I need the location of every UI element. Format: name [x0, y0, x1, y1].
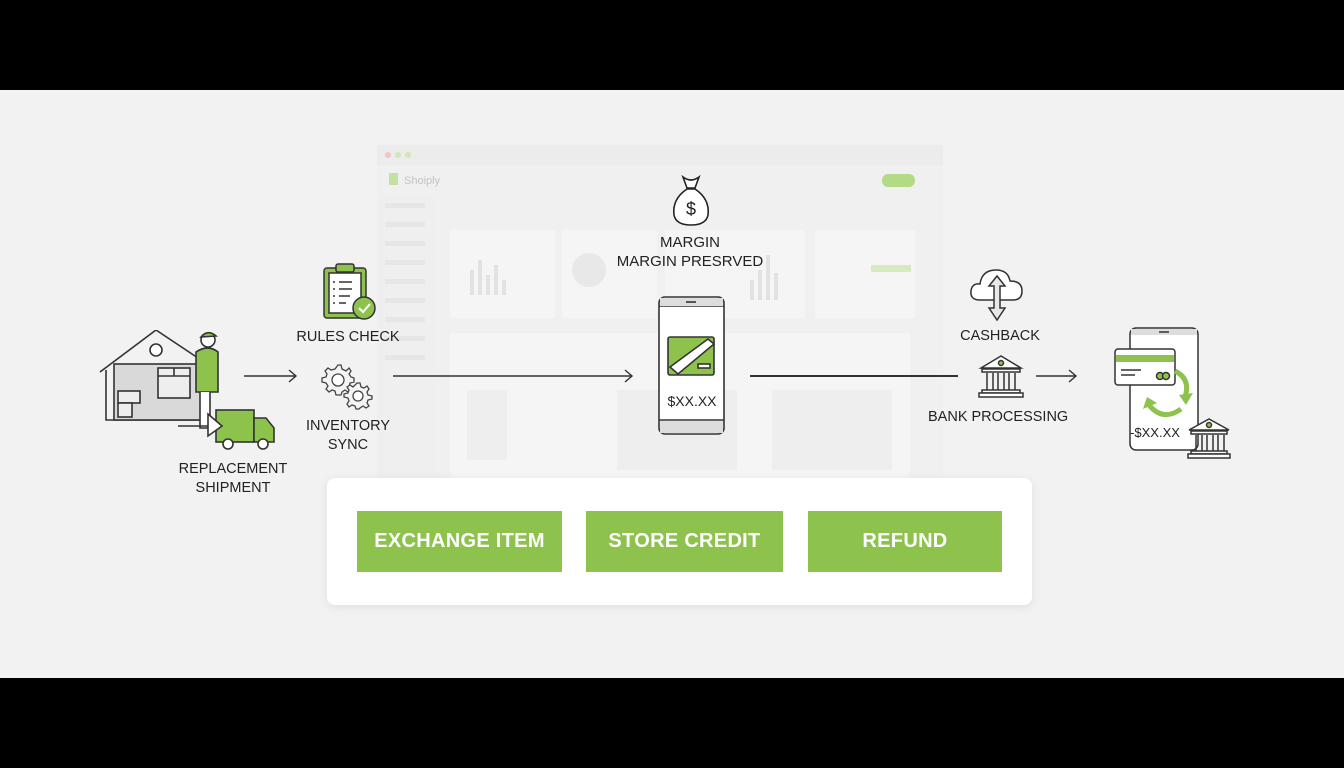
label: replacement shipment: SHIPMENT — [196, 480, 270, 496]
icon: phone with card: $XX.XX — [667, 393, 717, 409]
faded dashboard mockup: Shoiply — [404, 175, 441, 187]
icon: phone with card refund and bank: -$XX.XX — [1130, 425, 1180, 440]
button: store credit — [586, 511, 783, 572]
faded dashboard mockup — [377, 145, 943, 478]
label: inventory sync — [306, 418, 390, 453]
label: margin preserved: MARGIN PRESRVED — [617, 253, 763, 270]
button: refund: REFUND — [862, 530, 948, 552]
label: margin preserved: MARGIN — [660, 234, 720, 251]
panel: action buttons — [327, 478, 1032, 605]
line: phone to bank — [750, 375, 958, 377]
icon: cloud with arrows — [970, 269, 1023, 322]
label: inventory sync: SYNC — [328, 437, 368, 453]
label: replacement shipment — [179, 461, 288, 496]
label: bank processing: BANK PROCESSING — [928, 409, 1068, 425]
button: exchange item — [357, 511, 562, 572]
label: margin preserved — [617, 234, 763, 270]
button: exchange item: EXCHANGE ITEM — [374, 530, 545, 552]
arrow: to refund phone — [1036, 370, 1077, 382]
label: inventory sync: INVENTORY — [306, 418, 390, 434]
icon: money bag: $ — [686, 199, 696, 219]
icon: phone with card refund and bank — [1114, 327, 1231, 459]
icon: warehouse with worker and truck — [100, 330, 275, 450]
icon: clipboard check — [323, 263, 376, 320]
button: refund — [808, 511, 1002, 572]
label: cashback: CASHBACK — [960, 328, 1040, 344]
button: store credit: STORE CREDIT — [608, 530, 761, 552]
arrow: to phone — [393, 370, 633, 382]
icon: gears — [321, 364, 373, 410]
label: rules check: RULES CHECK — [296, 329, 400, 345]
icon: bank — [978, 355, 1024, 398]
icon: money bag — [673, 175, 709, 226]
main canvas — [0, 90, 1344, 678]
icon: phone with card — [658, 296, 725, 435]
arrow: warehouse to rules — [244, 370, 297, 382]
label: replacement shipment: REPLACEMENT — [179, 461, 287, 477]
